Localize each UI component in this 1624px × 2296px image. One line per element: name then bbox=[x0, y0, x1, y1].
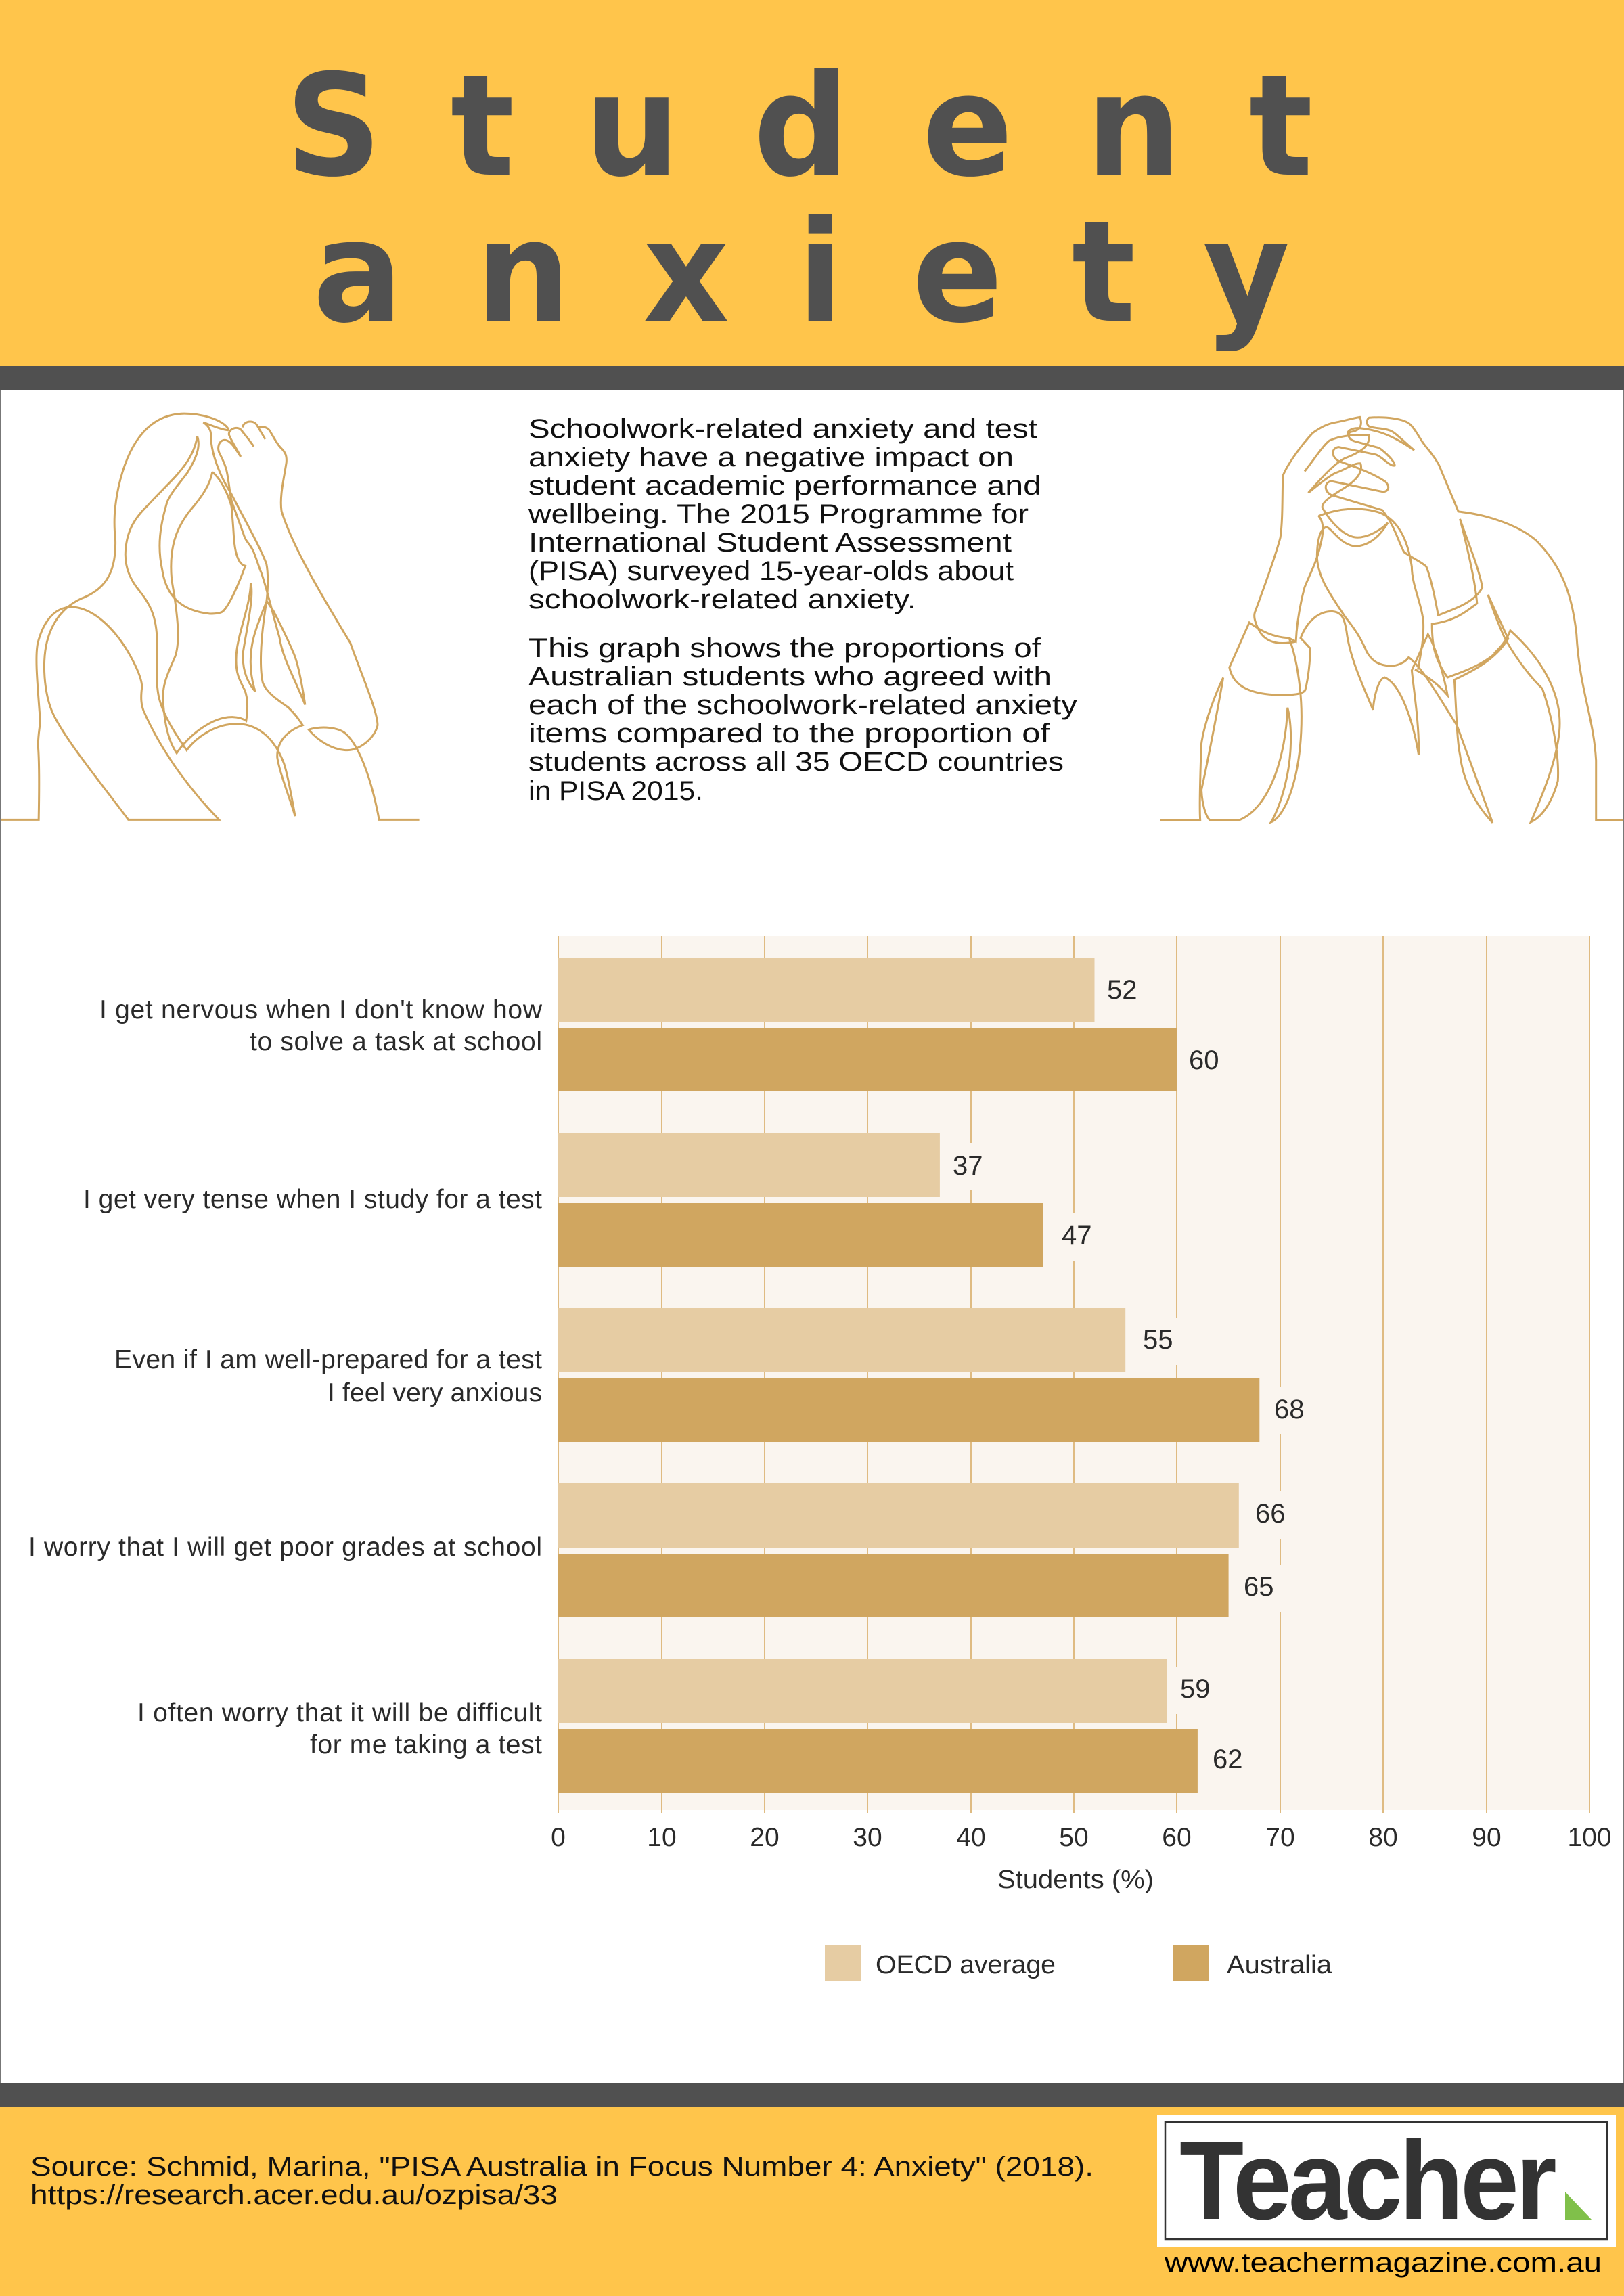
category labels: I get nervous when I don't know how bbox=[99, 995, 543, 1025]
intro text block: items compared to the proportion of bbox=[528, 719, 1050, 748]
x axis title: Students (%) bbox=[997, 1866, 1154, 1894]
x axis tick labels: 0 bbox=[551, 1823, 566, 1852]
panel: header banner bbox=[0, 0, 1624, 390]
value labels: 37 bbox=[953, 1151, 983, 1181]
value labels: 52 bbox=[1107, 975, 1137, 1005]
intro text block: (PISA) surveyed 15-year-olds about bbox=[528, 556, 1014, 586]
intro text block: students across all 35 OECD countries bbox=[528, 747, 1064, 777]
intro text block: schoolwork-related anxiety. bbox=[528, 585, 916, 614]
value labels: 60 bbox=[1189, 1045, 1219, 1075]
group: poor grades bbox=[558, 1483, 1239, 1617]
intro text block: each of the schoolwork-related anxiety bbox=[528, 690, 1077, 720]
grid lines and ticks bbox=[558, 936, 1590, 1813]
bar chart bbox=[28, 936, 1612, 1981]
x axis tick labels: 10 bbox=[647, 1823, 677, 1852]
value labels: 55 bbox=[1143, 1325, 1173, 1355]
category labels: I often worry that it will be difficult bbox=[137, 1698, 542, 1728]
group: well-prepared bbox=[558, 1308, 1259, 1442]
category labels: I worry that I will get poor grades at school bbox=[28, 1533, 542, 1562]
title bbox=[286, 44, 1313, 354]
x axis tick labels: 30 bbox=[853, 1823, 882, 1852]
intro text block: anxiety have a negative impact on bbox=[528, 443, 1014, 472]
legend: OECD average bbox=[876, 1951, 1056, 1979]
x axis tick labels: 60 bbox=[1162, 1823, 1192, 1852]
x axis tick labels: 40 bbox=[956, 1823, 986, 1852]
value labels bbox=[953, 975, 1305, 1774]
category labels: to solve a task at school bbox=[250, 1027, 542, 1056]
value labels: 66 bbox=[1255, 1499, 1286, 1529]
source text bbox=[30, 2152, 1093, 2210]
legend: Australia bbox=[1227, 1951, 1332, 1979]
logo: Teacher: Teacher bbox=[1179, 2118, 1556, 2243]
category labels: I feel very anxious bbox=[328, 1378, 542, 1408]
intro text block: Australian students who agreed with bbox=[528, 662, 1052, 692]
value labels: 68 bbox=[1274, 1395, 1305, 1424]
category labels bbox=[28, 995, 543, 1759]
intro text block: This graph shows the proportions of bbox=[528, 633, 1041, 663]
legend bbox=[825, 1945, 1332, 1981]
value labels: 59 bbox=[1180, 1674, 1210, 1704]
x axis tick labels: 100 bbox=[1567, 1823, 1612, 1852]
intro text block: wellbeing. The 2015 Programme for bbox=[528, 499, 1029, 529]
page side borders bbox=[0, 390, 1624, 2083]
intro text block: in PISA 2015. bbox=[528, 776, 703, 806]
illustration: student with hands on head bbox=[1160, 417, 1623, 823]
value labels: 62 bbox=[1213, 1744, 1242, 1774]
illustration: woman holding her hair bbox=[1, 413, 420, 819]
intro text block: Schoolwork-related anxiety and test bbox=[528, 414, 1037, 444]
group: difficult test bbox=[558, 1659, 1198, 1793]
value labels: 65 bbox=[1244, 1572, 1273, 1602]
title: anxiety bbox=[313, 190, 1290, 354]
source text: https://research.acer.edu.au/ozpisa/33 bbox=[30, 2180, 558, 2210]
website url: www.teachermagazine.com.au bbox=[1164, 2248, 1602, 2278]
intro text block bbox=[528, 414, 1077, 806]
x axis tick labels: 50 bbox=[1059, 1823, 1089, 1852]
title: Student bbox=[286, 44, 1313, 208]
x axis tick labels bbox=[551, 1823, 1612, 1852]
category labels: Even if I am well-prepared for a test bbox=[114, 1345, 542, 1374]
group: I get nervous bbox=[558, 958, 1177, 1091]
x axis tick labels: 90 bbox=[1472, 1823, 1502, 1852]
source text: Source: Schmid, Marina, "PISA Australia in Focus Number 4: Anxiety" (2018). bbox=[30, 2152, 1093, 2182]
category labels: I get very tense when I study for a test bbox=[83, 1185, 542, 1214]
plot background bbox=[558, 936, 1590, 1810]
x axis tick labels: 70 bbox=[1265, 1823, 1295, 1852]
value labels: 47 bbox=[1062, 1221, 1092, 1251]
group: I get very tense bbox=[558, 1133, 1043, 1267]
intro text block: International Student Assessment bbox=[528, 528, 1012, 558]
x axis tick labels: 20 bbox=[750, 1823, 780, 1852]
category labels: for me taking a test bbox=[310, 1730, 542, 1759]
intro text block: student academic performance and bbox=[528, 471, 1041, 501]
panel: footer bbox=[0, 2083, 1624, 2296]
x axis tick labels: 80 bbox=[1368, 1823, 1398, 1852]
value label halos bbox=[943, 968, 1315, 1784]
